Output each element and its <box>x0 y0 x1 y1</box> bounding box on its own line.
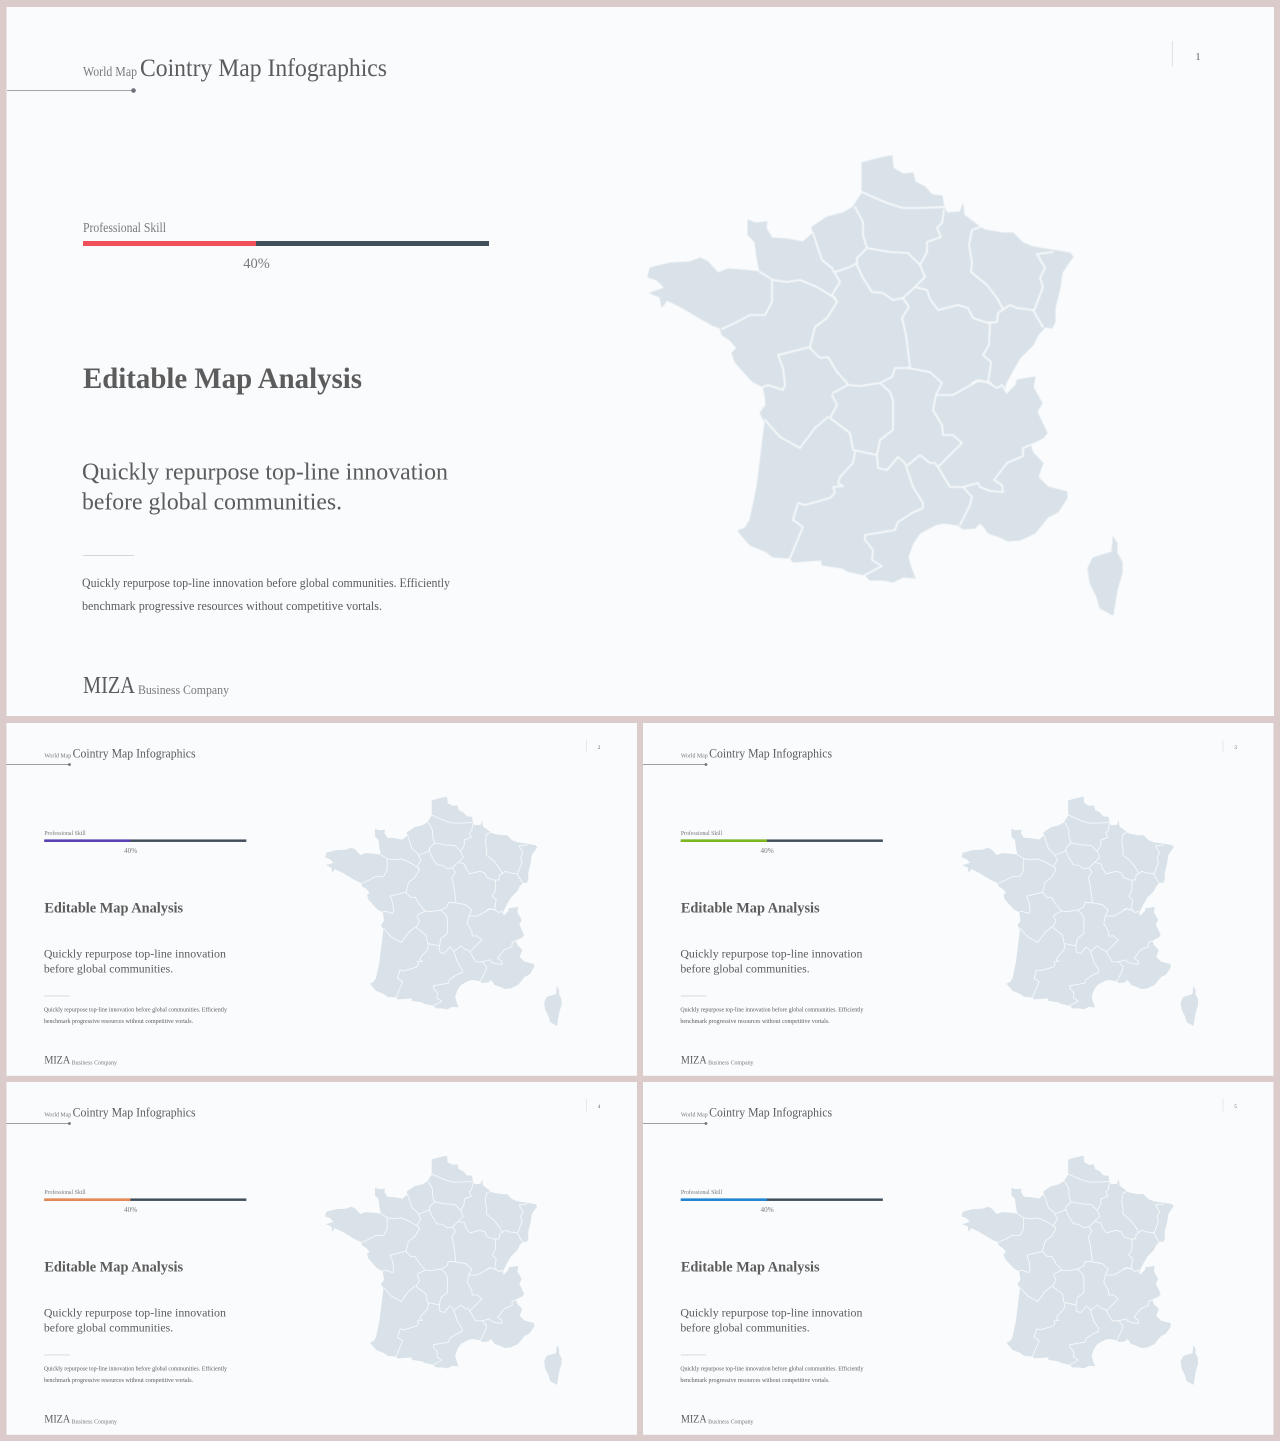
page number <box>1172 41 1200 66</box>
brand: Business Company <box>708 1059 754 1066</box>
subheading: before global communities. <box>44 1320 173 1334</box>
subheading: Quickly repurpose top-line innovation <box>44 946 226 960</box>
brand: MIZA <box>681 1052 707 1066</box>
progress bar: professional skill <box>681 830 883 855</box>
page number: 4 <box>598 1105 601 1110</box>
panel: slide 2 (purple) <box>6 723 637 1076</box>
heading: slide title: World Map <box>44 1111 72 1118</box>
heading: editable map analysis: Editable Map Analysis <box>44 1260 183 1276</box>
brand: Business Company <box>72 1418 118 1425</box>
brand: MIZA <box>44 1052 71 1066</box>
progress bar: professional skill: 40% <box>243 256 270 272</box>
progress bar: professional skill: 40% <box>761 847 774 855</box>
heading: slide title: Cointry Map Infographics <box>709 1105 832 1119</box>
heading: editable map analysis: Editable Map Analysis <box>83 362 362 395</box>
body text: benchmark progressive resources without competitive vortals. <box>680 1377 830 1384</box>
subheading <box>680 1305 862 1334</box>
heading: slide title: Cointry Map Infographics <box>709 746 832 760</box>
panel: slide 3 (green) <box>643 723 1273 1076</box>
title connector line with dot <box>6 1122 71 1125</box>
brand <box>83 673 230 699</box>
heading: slide title: World Map <box>83 64 137 79</box>
subheading: Quickly repurpose top-line innovation <box>680 1305 862 1319</box>
page number: 2 <box>598 746 601 751</box>
body text <box>44 1007 228 1025</box>
body text <box>680 1366 864 1384</box>
heading: slide title: Cointry Map Infographics <box>140 55 387 82</box>
heading: slide title: Cointry Map Infographics <box>73 1105 196 1119</box>
body text: Quickly repurpose top-line innovation before global communities. Efficiently <box>680 1366 864 1373</box>
brand: Business Company <box>138 683 230 697</box>
page number <box>1223 1099 1237 1111</box>
page number: 3 <box>1234 746 1237 751</box>
page number <box>586 740 601 752</box>
page number: 5 <box>1234 1105 1237 1110</box>
panel: slide 4 (orange) <box>6 1082 637 1435</box>
title connector line with dot <box>643 1122 707 1125</box>
progress bar: professional skill: Professional Skill <box>681 1189 722 1196</box>
body text: Quickly repurpose top-line innovation before global communities. Efficiently <box>44 1007 228 1014</box>
body text <box>82 575 450 613</box>
heading: editable map analysis: Editable Map Analysis <box>44 901 183 917</box>
body text: benchmark progressive resources without competitive vortals. <box>44 1377 193 1384</box>
progress bar: professional skill <box>44 1189 246 1214</box>
progress bar: professional skill <box>44 830 246 855</box>
progress bar: professional skill: Professional Skill <box>681 830 722 837</box>
subheading: before global communities. <box>82 490 342 516</box>
progress bar: professional skill: 40% <box>124 847 137 855</box>
brand: MIZA <box>44 1411 71 1425</box>
subheading <box>44 1305 226 1334</box>
title connector line with dot <box>6 763 71 766</box>
subheading <box>680 946 862 975</box>
body text: Quickly repurpose top-line innovation before global communities. Efficiently <box>44 1366 228 1373</box>
subheading: Quickly repurpose top-line innovation <box>82 460 448 486</box>
body text <box>680 1007 864 1025</box>
map of France <box>325 797 561 1026</box>
title connector line with dot <box>7 88 136 93</box>
brand: MIZA <box>681 1411 707 1425</box>
brand <box>681 1052 754 1066</box>
heading: editable map analysis: Editable Map Analysis <box>681 901 820 917</box>
map of France <box>648 156 1122 615</box>
heading: slide title: World Map <box>681 1111 708 1118</box>
map of France <box>325 1156 561 1385</box>
progress bar: professional skill: 40% <box>124 1206 137 1214</box>
body text: Quickly repurpose top-line innovation before global communities. Efficiently <box>680 1007 864 1014</box>
title connector line with dot <box>643 763 707 766</box>
progress bar: professional skill: Professional Skill <box>44 1189 86 1196</box>
brand <box>681 1411 754 1425</box>
page number <box>586 1099 601 1111</box>
page number: 1 <box>1196 52 1200 63</box>
progress bar: professional skill: 40% <box>761 1206 774 1214</box>
subheading: Quickly repurpose top-line innovation <box>44 1305 226 1319</box>
progress bar: professional skill <box>83 220 489 272</box>
map of France <box>962 1156 1198 1385</box>
subheading: before global communities. <box>44 961 173 975</box>
subheading: before global communities. <box>680 1320 810 1334</box>
brand: Business Company <box>708 1418 754 1425</box>
body text <box>44 1366 228 1384</box>
progress bar: professional skill <box>681 1189 883 1214</box>
body text: Quickly repurpose top-line innovation before global communities. Efficiently <box>82 575 450 590</box>
map of France <box>962 797 1198 1026</box>
subheading <box>82 460 448 516</box>
body text: benchmark progressive resources without competitive vortals. <box>82 598 382 613</box>
brand: Business Company <box>72 1059 118 1066</box>
brand <box>44 1052 118 1066</box>
panel: main slide 1 (red) <box>6 7 1274 716</box>
body text: benchmark progressive resources without competitive vortals. <box>680 1018 830 1025</box>
subheading: before global communities. <box>680 961 810 975</box>
heading: slide title: World Map <box>44 752 72 759</box>
brand: MIZA <box>83 673 136 699</box>
brand <box>44 1411 118 1425</box>
progress bar: professional skill: Professional Skill <box>83 220 166 235</box>
heading: slide title: Cointry Map Infographics <box>73 746 196 760</box>
page number <box>1223 740 1237 752</box>
body text: benchmark progressive resources without competitive vortals. <box>44 1018 193 1025</box>
panel: slide 5 (blue) <box>643 1082 1273 1435</box>
progress bar: professional skill: Professional Skill <box>44 830 86 837</box>
subheading: Quickly repurpose top-line innovation <box>680 946 862 960</box>
subheading <box>44 946 226 975</box>
heading: slide title: World Map <box>681 752 708 759</box>
heading: editable map analysis: Editable Map Analysis <box>681 1260 820 1276</box>
